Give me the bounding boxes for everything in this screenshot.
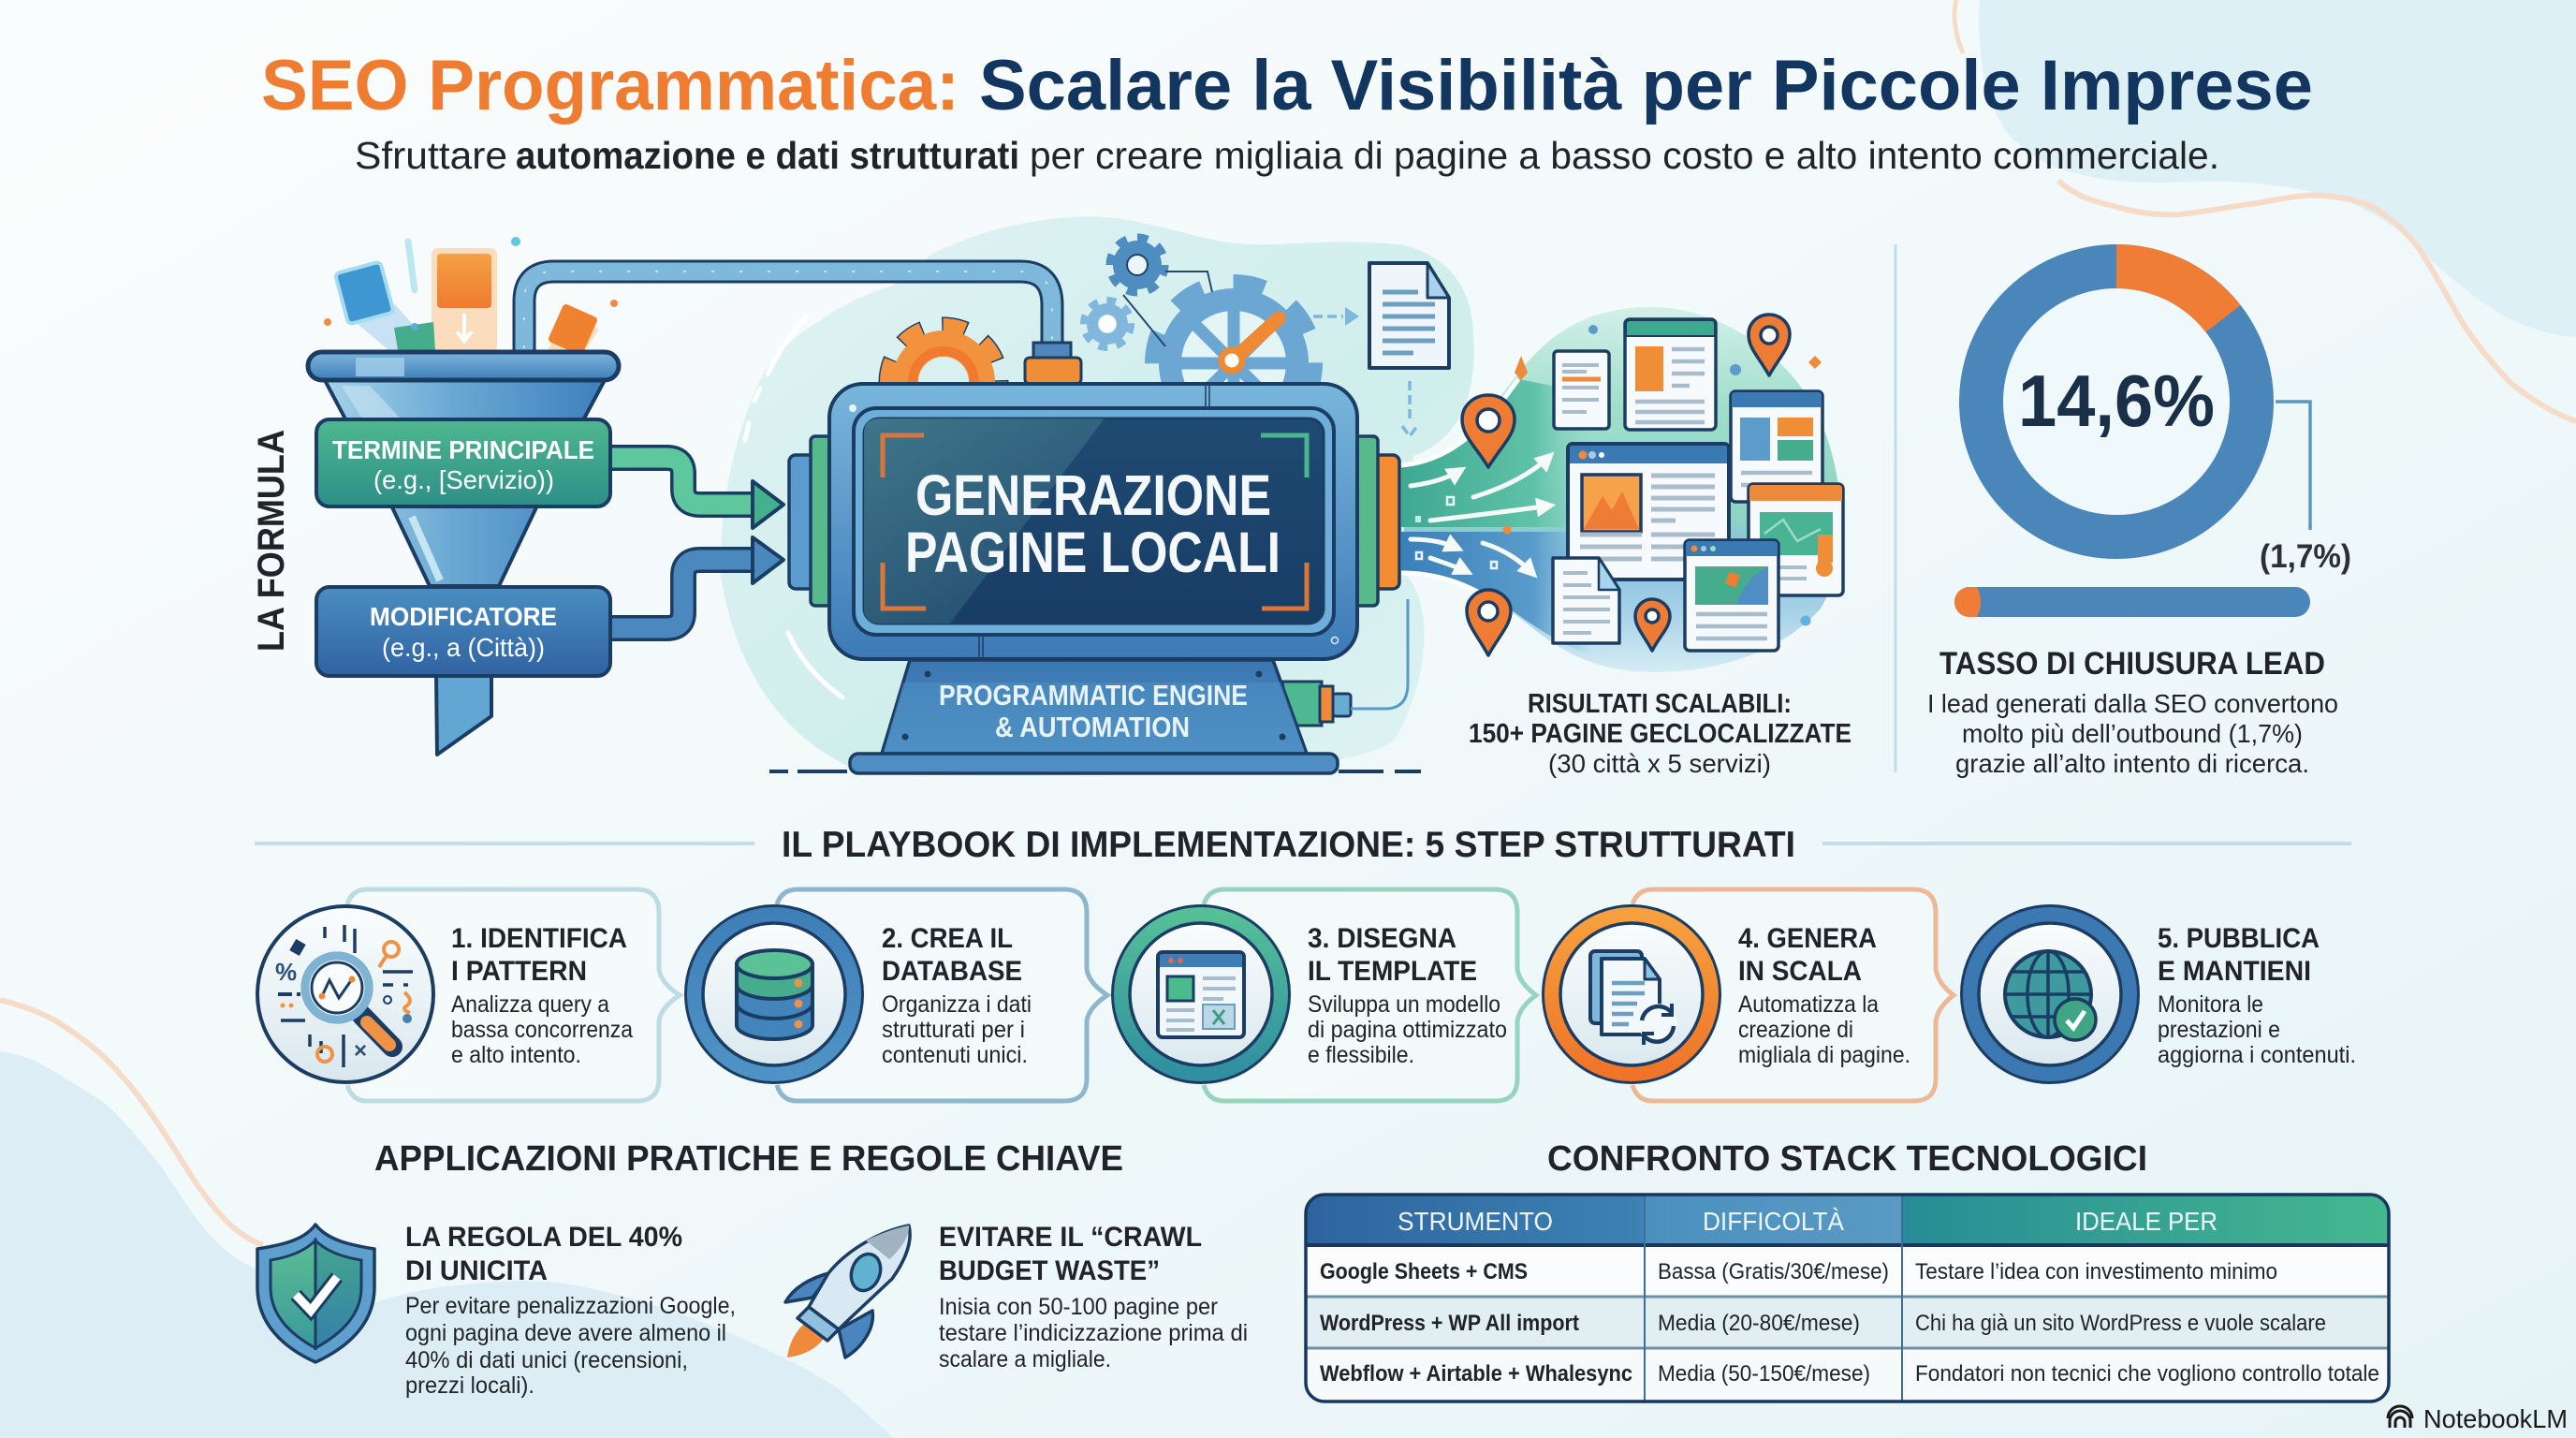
box: modificatore: (e.g., a (Città)) <box>382 633 545 662</box>
table row 2: Media (20-80€/mese) <box>1658 1311 1860 1336</box>
icon: rocket <box>785 1225 910 1357</box>
title: SEO Programmatica: <box>261 46 959 125</box>
text: contenuti unici. <box>882 1042 1028 1068</box>
bar chart <box>1954 587 2310 617</box>
text: tasso di chiusura: grazie all’alto intento di ricerca. <box>1955 749 2309 778</box>
text: crawl budget: scalare a migliale. <box>939 1346 1111 1372</box>
table row 1: Bassa (Gratis/30€/mese) <box>1658 1259 1889 1284</box>
engine stand with label: & AUTOMATION <box>995 711 1190 743</box>
text: strutturati per i <box>882 1017 1025 1043</box>
engine machine <box>769 238 1421 773</box>
donut chart: 14,6% <box>2018 360 2215 442</box>
text: 2. CREA IL <box>882 923 1013 954</box>
text: DATABASE <box>882 956 1022 987</box>
table row 3: Media (50-150€/mese) <box>1658 1361 1870 1387</box>
text: tasso di chiusura: TASSO DI CHIUSURA LEAD <box>1939 646 2325 682</box>
background blob behind engine <box>721 216 1474 775</box>
text <box>1308 923 1507 1068</box>
panel outline <box>347 889 680 1101</box>
decorative dashes on blob <box>745 316 842 697</box>
table row 1 <box>1320 1259 2277 1284</box>
pipe from funnel to machine <box>524 271 1052 350</box>
side tabs <box>789 436 1399 606</box>
text <box>2158 923 2356 1068</box>
window: main page <box>1568 444 1729 580</box>
icon: orange gear <box>878 316 1009 382</box>
text: Sviluppa un modello <box>1308 991 1500 1018</box>
step 1 <box>257 889 680 1101</box>
engine stand with label <box>850 660 1338 773</box>
table row 2: WordPress + WP All import <box>1320 1311 1579 1336</box>
window: small doc bottom <box>1553 558 1619 643</box>
subtitle: automazione e dati strutturati <box>516 134 1019 177</box>
text: crawl budget: testare l’indicizzazione prima di <box>939 1320 1248 1346</box>
machine screen <box>864 418 1324 624</box>
text: creazione di <box>1738 1017 1853 1043</box>
icon: magnifier: % <box>275 958 297 986</box>
text: crawl budget: BUDGET WASTE” <box>939 1255 1160 1286</box>
text: risultati scalabili: 150+ PAGINE GECLOCALIZZATE <box>1469 719 1852 749</box>
text: bassa concorrenza <box>451 1017 633 1043</box>
window: teal header <box>1625 319 1716 430</box>
text <box>882 923 1032 1068</box>
text: Analizza query a <box>451 991 609 1018</box>
window: map <box>1685 540 1778 651</box>
window: blue header <box>1731 391 1822 502</box>
step 3 <box>1113 889 1536 1101</box>
text: risultati scalabili: RISULTATI SCALABILI: <box>1528 689 1792 719</box>
table row 1: Google Sheets + CMS <box>1320 1259 1528 1284</box>
subtitle <box>355 134 2219 177</box>
table <box>1306 1195 2389 1401</box>
table row 3: Webflow + Airtable + Whalesync <box>1320 1361 1632 1387</box>
text: E MANTIENI <box>2158 956 2311 987</box>
text: e flessibile. <box>1308 1042 1414 1068</box>
arrow: blue to machine <box>608 537 783 628</box>
window: orange header chart <box>1749 484 1843 595</box>
table row 2 <box>1320 1311 2326 1336</box>
icon: location pins <box>1462 315 1790 655</box>
table header <box>1398 1207 2217 1236</box>
flow arrows to pages <box>1411 456 1550 574</box>
title <box>261 46 2313 125</box>
text: aggiorna i contenuti. <box>2158 1042 2356 1068</box>
text: crawl budget: Inisia con 50-100 pagine per <box>939 1294 1218 1320</box>
table row 3 <box>1320 1361 2379 1387</box>
funnel with data cubes <box>308 237 1052 755</box>
machine screen: PAGINE LOCALI <box>905 521 1281 584</box>
engine stand with label: PROGRAMMATIC ENGINE <box>939 679 1248 712</box>
accents <box>1503 325 1822 625</box>
box: modificatore: MODIFICATORE <box>370 602 557 631</box>
value: 1,7%: (1,7%) <box>2260 538 2351 575</box>
text: regola del 40%: 40% di dati unici (recensioni, <box>405 1347 688 1373</box>
machine frame <box>829 384 1357 659</box>
icon: document <box>1369 263 1449 368</box>
box: termine principale: TERMINE PRINCIPALE <box>332 435 594 464</box>
text: Monitora le <box>2158 991 2263 1018</box>
icon: documents with refresh <box>1544 906 1720 1082</box>
icon: magnifier <box>257 906 433 1082</box>
text: regola del 40%: prezzi locali). <box>405 1372 534 1399</box>
table row 1: Testare l’idea con investimento minimo <box>1915 1259 2277 1284</box>
icon: globe with check <box>1962 906 2138 1082</box>
text: regola del 40%: Per evitare penalizzazioni Google, <box>405 1293 736 1319</box>
callout line <box>2276 402 2310 530</box>
text: IL TEMPLATE <box>1308 956 1477 987</box>
results: page windows <box>1553 319 1843 651</box>
icon: template <box>1113 906 1289 1082</box>
icon: small blue gear bottom <box>1084 301 1131 347</box>
text: Automatizza la <box>1738 991 1879 1018</box>
text: regola del 40%: DI UNICITA <box>405 1255 548 1286</box>
text: regola del 40% <box>405 1222 736 1399</box>
table header: IDEALE PER <box>2075 1207 2217 1236</box>
step 4 <box>1544 889 1954 1101</box>
step 2 <box>686 889 1107 1101</box>
text: risultati scalabili: (30 città x 5 servizi) <box>1548 749 1771 778</box>
heading: confronto: CONFRONTO STACK TECNOLOGICI <box>1547 1139 2147 1179</box>
text: e alto intento. <box>451 1042 581 1068</box>
panel outline <box>1204 889 1536 1101</box>
text: 1. IDENTIFICA <box>451 923 627 954</box>
icon: magnifier: × <box>354 1038 367 1064</box>
icon: data cubes <box>324 237 618 356</box>
window: small doc top <box>1554 351 1609 429</box>
heading: playbook: IL PLAYBOOK DI IMPLEMENTAZIONE: 5 STEP STRUTTURATI <box>782 825 1795 865</box>
results blob <box>1401 307 1840 672</box>
subtitle: Sfruttare <box>355 134 507 177</box>
title: Scalare la Visibilità per Piccole Imprese <box>979 46 2313 125</box>
text: prestazioni e <box>2158 1017 2280 1043</box>
table header: DIFFICOLTÀ <box>1703 1207 1844 1236</box>
heading: applicazioni: APPLICAZIONI PRATICHE E REGOLE CHIAVE <box>374 1139 1123 1179</box>
text: migliala di pagine. <box>1738 1042 1910 1068</box>
step 5 <box>1962 906 2356 1082</box>
text: tasso di chiusura: I lead generati dalla SEO convertono <box>1927 689 2338 718</box>
table row 2: Chi ha già un sito WordPress e vuole scalare <box>1915 1311 2326 1336</box>
ground line <box>769 770 1421 773</box>
divider <box>1895 244 1896 772</box>
small squares on flow <box>1415 497 1497 568</box>
arrow: from document down <box>1402 381 1417 436</box>
table row 3: Fondatori non tecnici che vogliono controllo totale <box>1915 1361 2379 1387</box>
icon: shield <box>257 1225 374 1362</box>
text: regola del 40%: LA REGOLA DEL 40% <box>405 1222 682 1253</box>
text: regola del 40%: ogni pagina deve avere almeno il <box>405 1320 726 1346</box>
engine nub <box>1282 599 1408 726</box>
pipe connector <box>1025 343 1081 384</box>
text: Organizza i dati <box>882 991 1032 1018</box>
notebooklm logo: NotebookLM <box>2423 1404 2568 1433</box>
text: risultati scalabili <box>1469 689 1852 778</box>
text: 4. GENERA <box>1738 923 1877 954</box>
text: tasso di chiusura: molto più dell’outbound (1,7%) <box>1962 719 2303 748</box>
box: termine principale: (e.g., [Servizio)) <box>373 465 554 494</box>
arrow: to document <box>1313 307 1359 326</box>
funnel body <box>308 352 619 755</box>
text: 3. DISEGNA <box>1308 923 1456 954</box>
arrow: green to machine <box>608 458 783 528</box>
donut chart <box>1981 266 2252 537</box>
text: di pagina ottimizzato <box>1308 1017 1507 1043</box>
label: la formula: LA FORMULA <box>251 430 292 652</box>
table header: STRUMENTO <box>1398 1207 1553 1236</box>
panel outline <box>777 889 1107 1101</box>
subtitle: per creare migliaia di pagine a basso costo e alto intento commerciale. <box>1030 134 2219 177</box>
text <box>1738 923 1910 1068</box>
box: termine principale <box>316 419 610 506</box>
text: IN SCALA <box>1738 956 1862 987</box>
text: crawl budget: EVITARE IL “CRAWL <box>939 1222 1202 1253</box>
icon: database <box>686 906 862 1082</box>
icon: small blue gear top <box>1110 238 1164 292</box>
text <box>451 923 633 1068</box>
text: 5. PUBBLICA <box>2158 923 2320 954</box>
panel outline <box>1632 889 1954 1101</box>
text: crawl budget <box>939 1222 1248 1372</box>
gears on top of machine <box>878 234 1323 382</box>
machine screen: GENERAZIONE <box>915 463 1271 527</box>
text: tasso di chiusura <box>1927 646 2338 778</box>
icon: large blue gear <box>1145 274 1323 382</box>
box: modificatore <box>316 587 610 676</box>
text: I PATTERN <box>451 956 587 987</box>
